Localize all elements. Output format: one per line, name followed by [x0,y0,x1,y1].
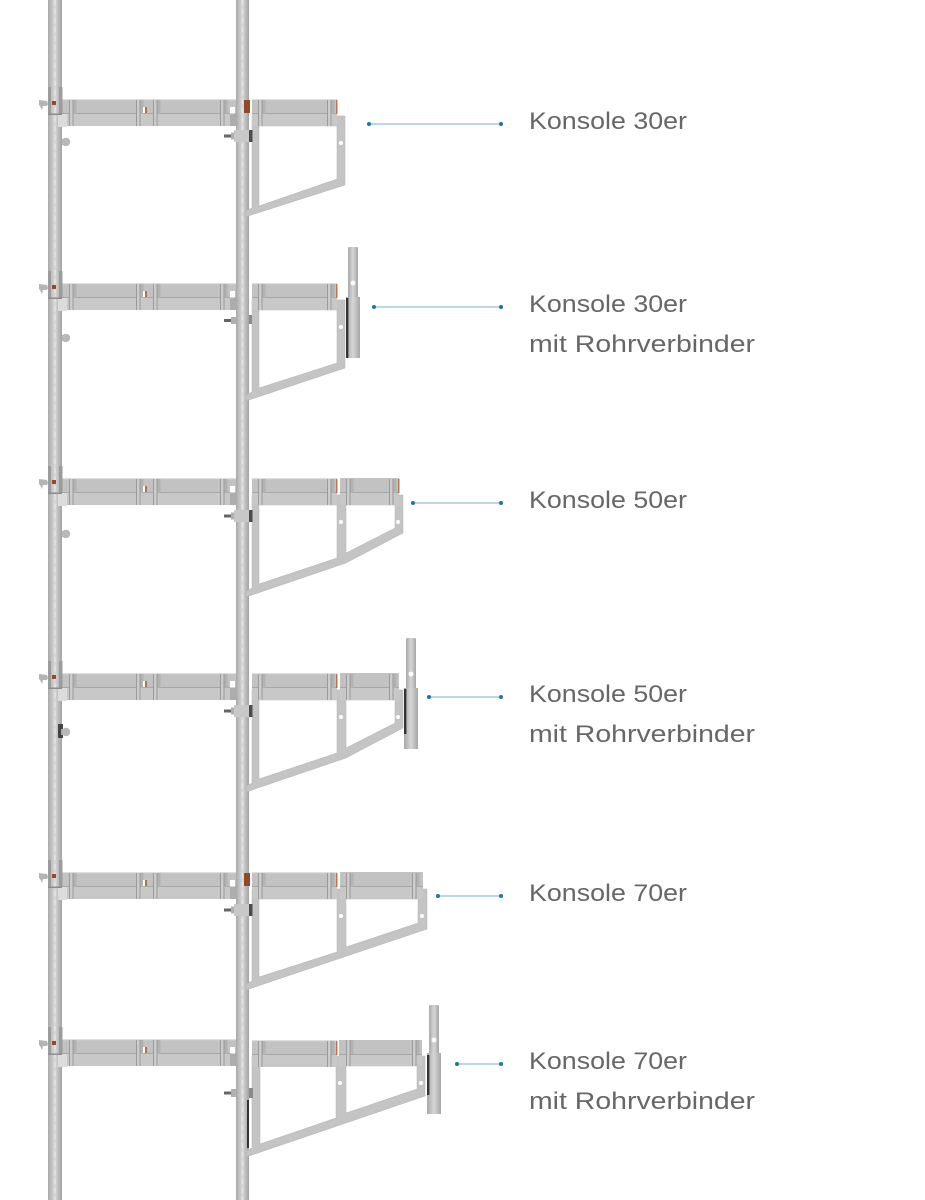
mast: right vertical tube [236,0,249,1200]
mast: left vertical tube [48,0,62,1200]
row 3 right deck [252,478,338,505]
row 4 tube connector [404,638,418,749]
row 4 bracket [246,690,403,792]
row 6 right deck [252,1040,338,1067]
row 2: Konsole 30er mit Rohrverbinder [39,247,360,401]
row 6 tube connector [427,1005,441,1114]
row 5 left deck [58,872,236,900]
leader line: Konsole 70er mit Rohrverbinder [455,1062,503,1066]
label: Konsole 50er mit Rohrverbinder [529,681,755,748]
row 5 right deck [252,872,338,899]
label: Konsole 70er: Konsole 70er [529,880,687,907]
label: Konsole 30er mit Rohrverbinder: Konsole 30er [529,291,687,318]
row 3 left deck [58,478,236,506]
row 1 bracket [245,116,345,217]
label: Konsole 70er mit Rohrverbinder: mit Rohrverbinder [529,1088,755,1115]
label: Konsole 30er mit Rohrverbinder: mit Rohrverbinder [529,331,755,358]
row 4 outer deck [340,673,399,700]
label: Konsole 50er: Konsole 50er [529,487,687,514]
row 4 right deck [252,673,338,700]
row 2 right deck [252,283,338,310]
row 5 outer deck [340,872,423,899]
row 5 bracket [246,889,427,990]
row 4 fittings [39,661,400,738]
row 4: Konsole 50er mit Rohrverbinder [39,638,418,792]
leader line: Konsole 30er [367,122,503,126]
row 1 left deck [58,99,236,127]
row 1 fittings [39,87,343,146]
row 6 bracket [246,1056,425,1157]
leader line: Konsole 70er [436,894,503,898]
leader line: Konsole 50er mit Rohrverbinder [427,695,503,699]
label: Konsole 50er mit Rohrverbinder: mit Rohrverbinder [529,721,755,748]
row 6 outer deck [339,1040,422,1066]
label: Konsole 50er mit Rohrverbinder: Konsole 50er [529,681,687,708]
row 6: Konsole 70er mit Rohrverbinder [39,1005,441,1157]
leader line: Konsole 50er [411,501,503,505]
row 2 tube connector [346,247,360,358]
label: Konsole 30er: Konsole 30er [529,108,687,135]
row 5: Konsole 70er [39,860,427,990]
row 2 bracket [246,300,345,401]
row 1: Konsole 30er [39,87,345,217]
row 4 left deck [58,673,236,701]
row 3: Konsole 50er [39,466,403,597]
leader line: Konsole 30er mit Rohrverbinder [372,305,503,309]
label: Konsole 70er mit Rohrverbinder [529,1048,755,1115]
row 6 left deck [58,1039,236,1067]
row 2 fittings [39,271,343,342]
row 3 bracket [246,495,403,597]
row 3 fittings [39,466,400,538]
label: Konsole 70er mit Rohrverbinder: Konsole 70er [529,1048,687,1075]
row 6 fittings [39,1027,423,1148]
row 3 outer deck [340,478,400,505]
label: Konsole 30er mit Rohrverbinder [529,291,755,358]
row 1 right deck [252,99,338,126]
row 5 fittings [39,860,424,918]
row 2 left deck [58,283,236,311]
